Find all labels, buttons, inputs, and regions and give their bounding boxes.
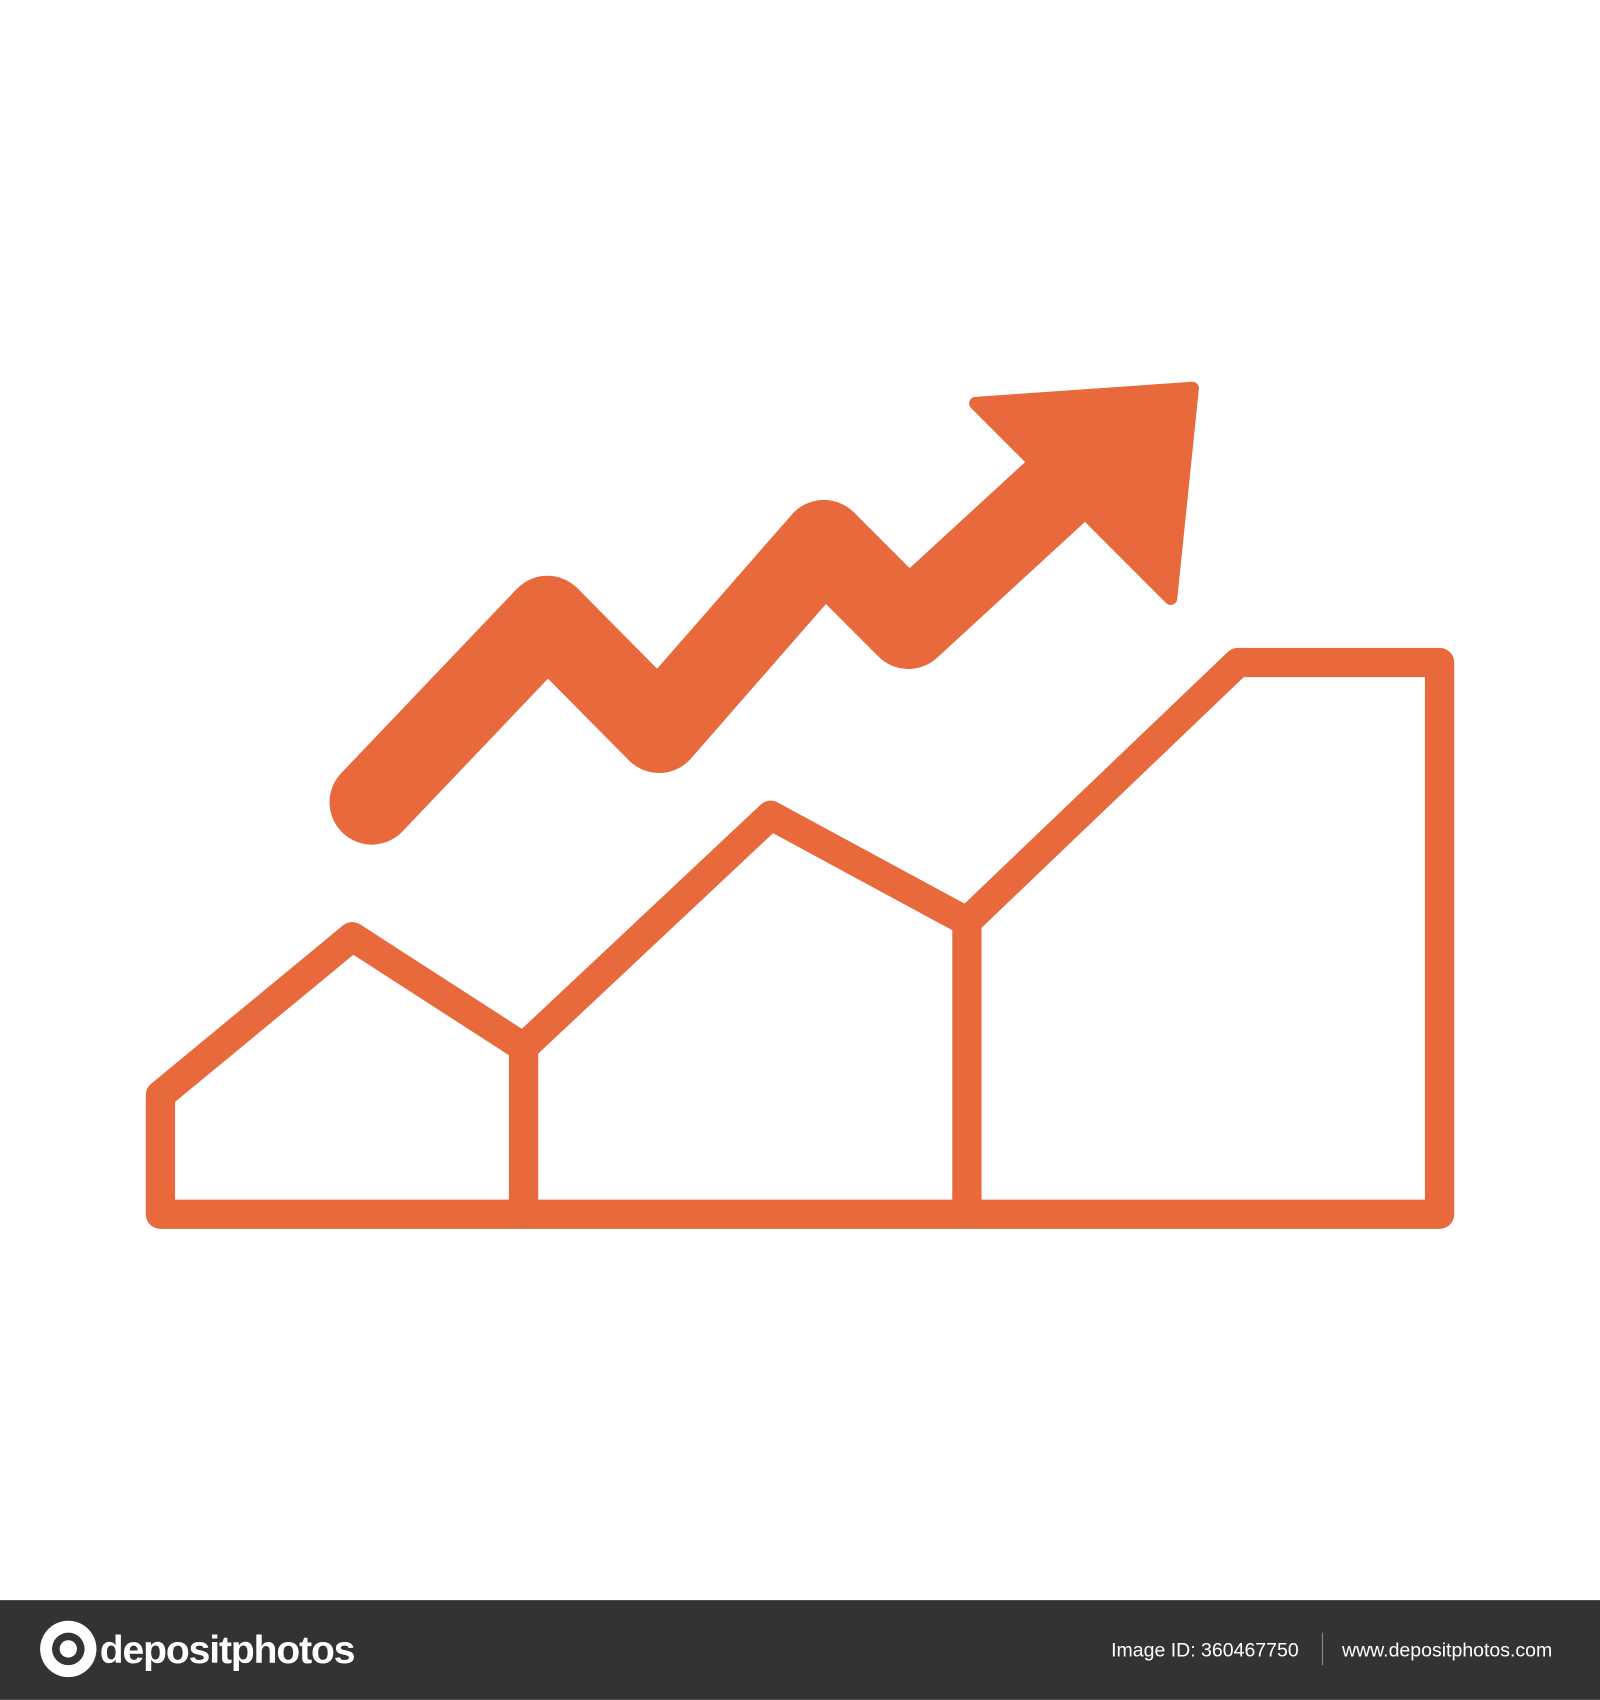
footer bar	[0, 1600, 1600, 1700]
icon: growth chart	[160, 388, 1440, 1214]
icon: depositphotos logo	[40, 1621, 96, 1677]
brand name: depositphotos	[100, 1629, 355, 1672]
website url: www.depositphotos.com	[1341, 1640, 1552, 1662]
arrowhead	[976, 388, 1192, 599]
area chart outline	[160, 662, 1440, 1214]
arrow: rising zigzag line	[372, 388, 1192, 802]
image id: Image ID: 360467750	[1111, 1640, 1299, 1662]
